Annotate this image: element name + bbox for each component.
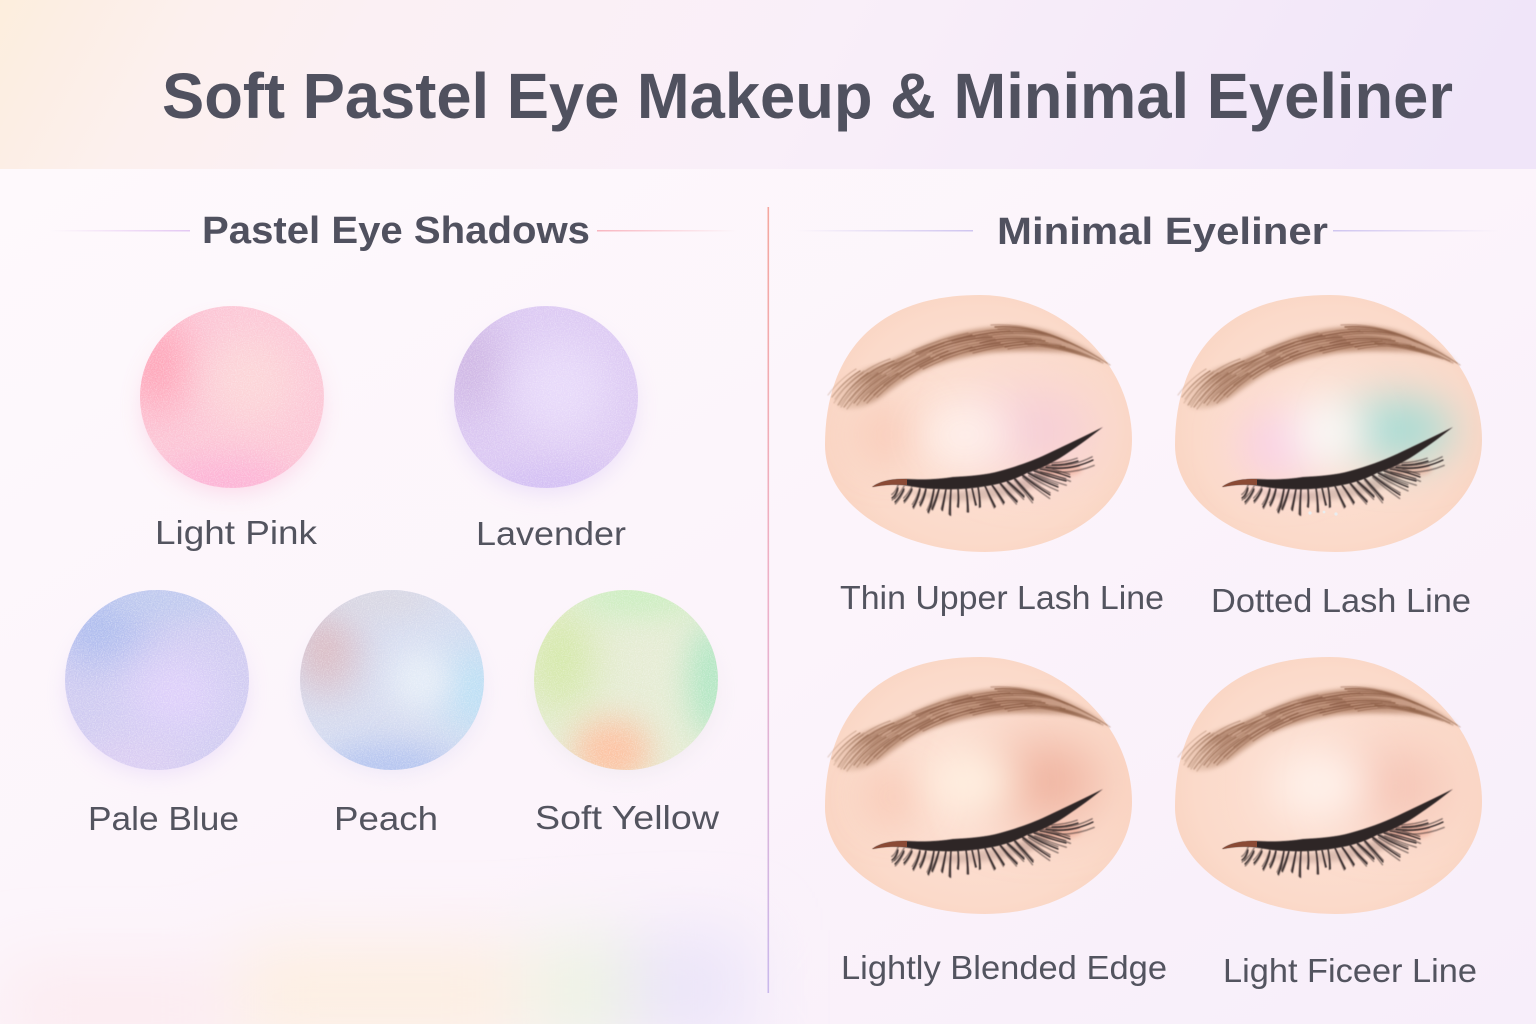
title: Soft Pastel Eye Makeup & Minimal Eyeliner — [162, 60, 1453, 132]
icon: lash line dots — [1308, 511, 1338, 516]
heading: Pastel Eye Shadows: Pastel Eye Shadows — [202, 210, 590, 252]
eye: thin upper lash line — [825, 295, 1132, 552]
label: Thin Upper Lash Line: Thin Upper Lash Line — [840, 579, 1164, 616]
label: Lightly Blended Edge: Lightly Blended Edge — [841, 949, 1167, 986]
swatch: lavender — [454, 306, 638, 496]
watercolour wash at bottom — [0, 930, 750, 1024]
label: Dotted Lash Line: Dotted Lash Line — [1211, 582, 1471, 619]
heading: Minimal Eyeliner: Minimal Eyeliner — [997, 211, 1328, 253]
swatch: pale blue — [64, 590, 250, 776]
label: Peach: Peach — [334, 800, 438, 837]
header band — [0, 0, 1536, 169]
label: Light Pink: Light Pink — [155, 514, 318, 551]
swatch: peach — [300, 590, 484, 772]
swatch: soft yellow — [534, 590, 718, 770]
label: Lavender: Lavender — [476, 515, 626, 552]
label: Light Ficeer Line: Light Ficeer Line — [1223, 952, 1477, 989]
eye: dotted lash line — [1175, 295, 1482, 552]
eye: lightly blended edge — [825, 657, 1132, 914]
eye: light ficeer line — [1175, 657, 1482, 914]
label: Pale Blue: Pale Blue — [88, 800, 239, 837]
label: Soft Yellow: Soft Yellow — [535, 799, 719, 836]
swatch: light pink — [137, 306, 327, 499]
